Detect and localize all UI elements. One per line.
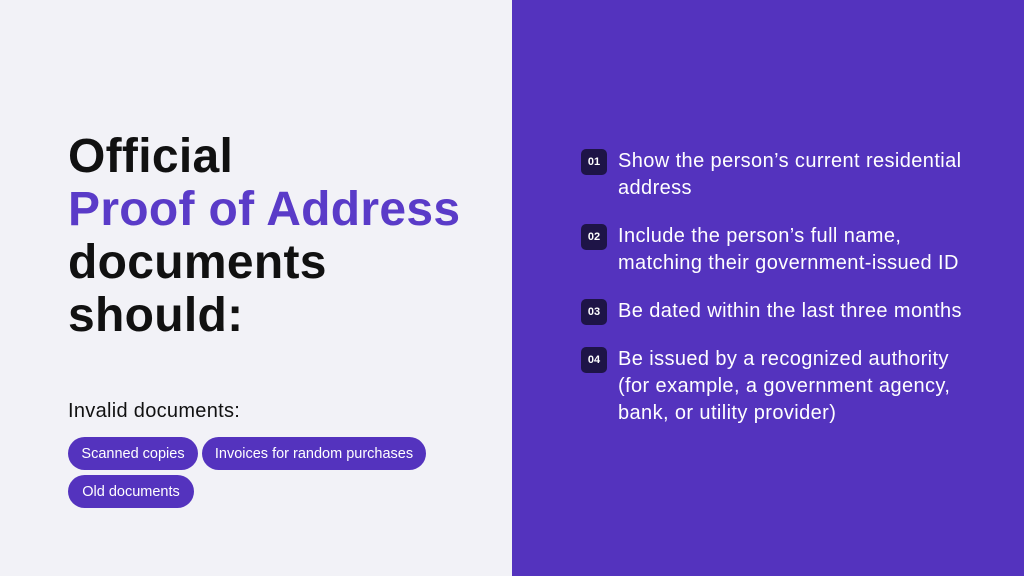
item 04: bank, or utility provider) [618, 402, 836, 424]
item 03: Be dated within the last three months [618, 300, 962, 322]
title: documents [68, 236, 327, 289]
chip: invoices [202, 437, 426, 470]
chip: invoices: Invoices for random purchases [215, 446, 413, 462]
item 01: Show the person’s current residential [618, 150, 962, 172]
title: Official [68, 130, 233, 183]
chip: old documents [68, 475, 194, 508]
title: Proof of Address [68, 183, 460, 236]
item 03: 03 [588, 306, 600, 318]
chip: old documents: Old documents [82, 484, 180, 500]
item 04: 04 [588, 354, 600, 366]
item 04: Be issued by a recognized authority [618, 348, 949, 370]
panel: right [512, 0, 1024, 576]
item 04 [581, 347, 950, 424]
item 01: address [618, 177, 692, 199]
item 02: 02 [588, 231, 600, 243]
chip: scanned copies [68, 437, 198, 470]
item 01 [581, 149, 962, 199]
item 04: (for example, a government agency, [618, 375, 950, 397]
item 02: matching their government-issued ID [618, 252, 959, 274]
item 02: Include the person’s full name, [618, 225, 901, 247]
title: should: [68, 289, 243, 342]
title [68, 130, 460, 342]
item 01: 01 [588, 156, 600, 168]
chip: scanned copies: Scanned copies [81, 446, 185, 462]
heading: invalid documents: Invalid documents: [68, 400, 240, 422]
item 02 [581, 224, 959, 274]
panel: left [0, 0, 512, 576]
